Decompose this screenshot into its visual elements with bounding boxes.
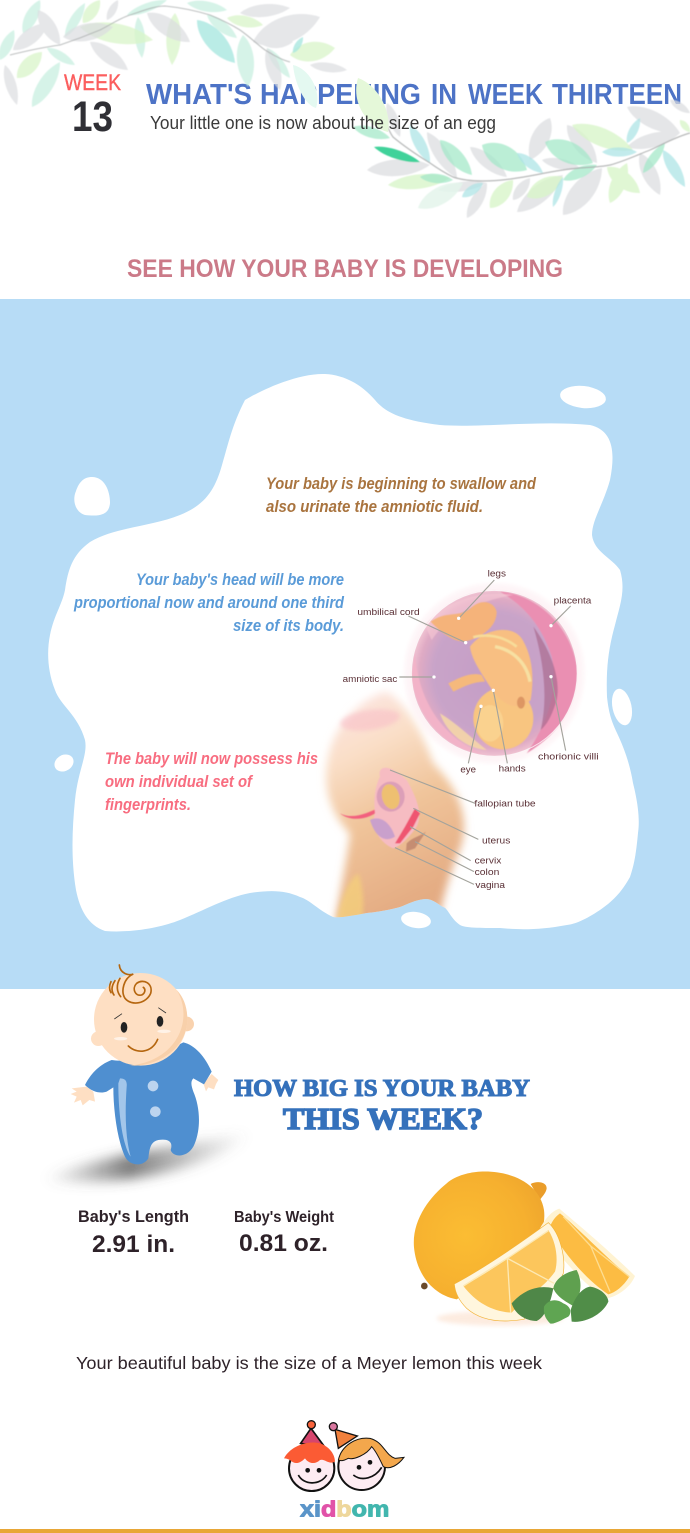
diagram labels: vagina [475,880,505,890]
callout: fingerprints: The baby will now possess his [105,749,318,768]
back slice [538,1209,635,1298]
ears [91,1031,106,1046]
diagram labels: chorionic villi [538,751,599,761]
hands [71,1087,95,1105]
mother's body [326,692,464,923]
callout: fingerprints: fingerprints. [105,795,191,814]
section heading: SEE HOW YOUR BABY IS DEVELOPING [127,255,563,283]
diagram labels [343,569,599,890]
diagram labels: amniotic sac [343,674,398,684]
caption: Your beautiful baby is the size of a Meyer lemon this week [76,1353,542,1373]
diagram labels: cervix [475,855,502,865]
panel: baby development [0,299,690,989]
callout: swallow: Your baby is beginning to swallow and [266,474,537,493]
blue background [0,299,690,989]
heading: how big [234,1076,530,1136]
stat: length: Baby's Length [78,1207,189,1226]
stat: weight [234,1209,335,1257]
logo wordmark: xidbom [300,1497,389,1522]
girl with hat [329,1423,404,1490]
diagram labels: colon [475,867,499,877]
sac rim [411,590,577,756]
fetus [431,602,533,749]
boy with hat [284,1421,335,1491]
stat: weight: 0.81 oz. [239,1230,328,1257]
small white blobs [51,384,635,930]
callout: head: Your baby's head will be more [136,570,344,589]
diagram labels: umbilical cord [357,607,420,617]
leader lines [390,580,571,884]
leader dots [432,617,553,708]
callout: swallow: also urinate the amniotic fluid. [266,497,483,516]
subtitle: Your little one is now about the size of an egg [150,113,496,133]
week label [64,70,121,141]
buttons [148,1081,158,1091]
diagram labels: placenta [554,596,591,606]
whole lemon [414,1172,544,1299]
stat: weight: Baby's Weight [234,1209,335,1226]
main title: HAPPENING [260,79,421,111]
heading: how big: THIS WEEK? [283,1101,483,1136]
front slice [454,1223,564,1321]
leaf branch top left [0,0,348,111]
callout: fingerprints: own individual set of [105,772,254,791]
heading: how big: HOW BIG IS YOUR BABY [234,1076,530,1102]
mint leaves [512,1270,608,1324]
lemon nub [531,1182,547,1200]
main title: WHAT'S [146,79,252,111]
stat: length: 2.91 in. [92,1231,175,1258]
head [94,973,187,1066]
stat: length [78,1207,189,1258]
callout: head: size of its body. [233,616,344,635]
diagram labels: fallopian tube [474,799,536,809]
week label: 13 [72,93,113,141]
callout: head: proportional now and around one third [73,593,345,612]
diagram labels: hands [499,763,526,773]
amniotic sac [404,583,584,763]
week label: WEEK [64,70,121,95]
white blob [48,374,639,931]
main title: IN [431,79,457,111]
leaf branch right [352,97,690,222]
logo [284,1421,404,1522]
diagram labels: eye [460,764,476,774]
face [114,1008,171,1051]
diagram labels: legs [488,569,507,579]
image: lemon [414,1172,635,1326]
romper [85,1042,212,1164]
diagram labels: uterus [482,836,511,846]
main title: WEEK [468,79,543,111]
bottom rule [0,1529,690,1533]
leaf over title right [356,78,389,132]
diagram: fetus in womb [343,569,599,890]
icon: cartoon baby [43,965,250,1182]
leaf over title left [293,65,317,108]
baby shadow [43,1133,250,1182]
hair [109,965,151,1003]
